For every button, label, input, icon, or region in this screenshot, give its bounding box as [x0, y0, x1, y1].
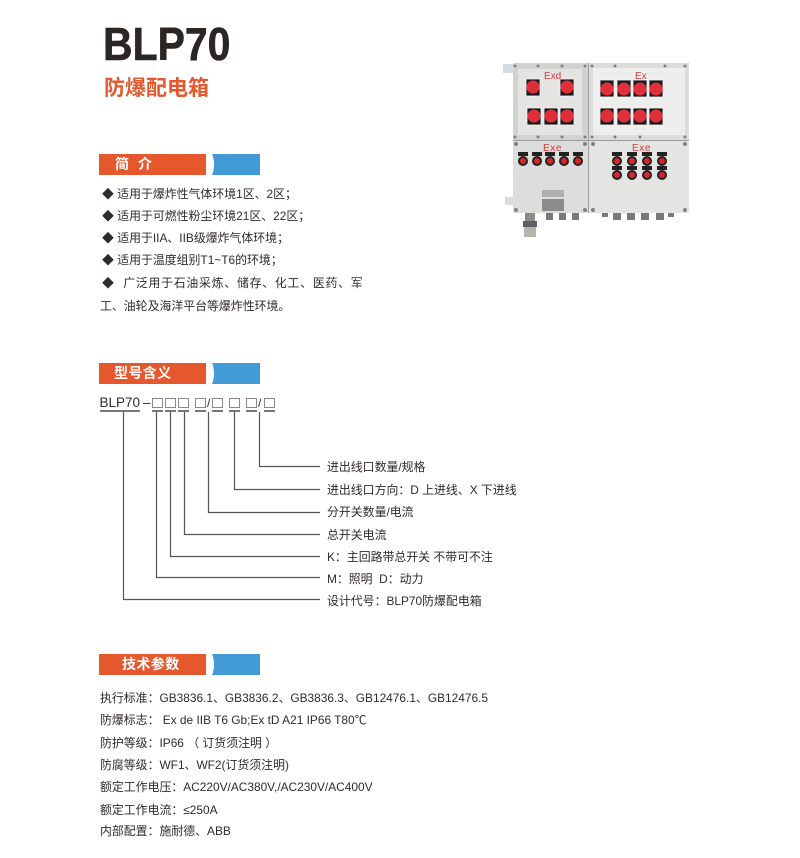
- header accent: intro: [210, 154, 260, 175]
- model code diagram: /: [207, 396, 211, 410]
- intro bullet list: ◆ 适用于温度组别T1~T6的环境；: [102, 253, 283, 267]
- model code legend: K：主回路带总开关 不带可不注: [327, 550, 493, 564]
- model code legend: 分开关数量/电流: [327, 505, 414, 519]
- product photo: explosion-proof distribution box: Exe: [632, 143, 651, 154]
- technical parameter list: 额定工作电流：≤250A: [100, 803, 218, 817]
- model code legend: 进出线口数量/规格: [327, 460, 425, 474]
- intro bullet list: ◆ 适用于可燃性粉尘环境21区、22区；: [102, 209, 310, 223]
- model code diagram: /: [258, 396, 262, 410]
- intro bullet list: ◆ 广泛用于石油采炼、储存、化工、医药、军: [102, 276, 363, 290]
- model code legend: 设计代号：BLP70防爆配电箱: [327, 594, 482, 608]
- technical parameter list: 执行标准：GB3836.1、GB3836.2、GB3836.3、GB12476.1、GB12476.5: [100, 691, 488, 705]
- intro bullet list: [100, 187, 363, 313]
- section header: model meaning: [99, 363, 206, 384]
- header accent: technical parameters: [210, 654, 260, 675]
- section header: technical parameters: [99, 654, 206, 675]
- model code diagram: BLP70: [100, 395, 140, 410]
- technical parameter list: [100, 691, 488, 838]
- technical parameter list: 防护等级：IP66 （ 订货须注明 ）: [100, 736, 277, 750]
- technical parameter list: 额定工作电压：AC220V/AC380V,/AC230V/AC400V: [100, 780, 373, 794]
- intro bullet list: ◆ 适用于IIA、IIB级爆炸气体环境；: [102, 231, 289, 245]
- technical parameter list: 防爆标志： Ex de IIB T6 Gb;Ex tD A21 IP66 T80℃: [100, 713, 367, 727]
- model code diagram: –: [143, 395, 151, 410]
- section header: intro: 简介: [115, 156, 161, 172]
- subtitle: 防爆配电箱: [104, 77, 209, 100]
- intro bullet list: 工、油轮及海洋平台等爆炸性环境。: [100, 299, 290, 313]
- intro bullet list: ◆ 适用于爆炸性气体环境1区、2区；: [102, 187, 297, 201]
- product photo: explosion-proof distribution box: Exe: [543, 143, 562, 154]
- technical parameter list: 内部配置：施耐德、ABB: [100, 824, 231, 838]
- section header: intro: [99, 154, 206, 175]
- section header: technical parameters: 技术参数: [122, 656, 180, 672]
- product photo: explosion-proof distribution box: Exd: [544, 71, 561, 82]
- model code legend: 进出线口方向：D 上进线、X 下进线: [327, 483, 517, 497]
- section header: model meaning: 型号含义: [114, 365, 172, 381]
- header accent: model meaning: [210, 363, 260, 384]
- product photo: explosion-proof distribution box: Ex: [635, 71, 647, 82]
- title: BLP70: [103, 18, 230, 70]
- technical parameter list: 防腐等级：WF1、WF2(订货须注明): [100, 758, 289, 772]
- model code legend: 总开关电流: [327, 528, 386, 542]
- model code legend: [327, 460, 517, 608]
- model code legend: M：照明 D：动力: [327, 572, 423, 586]
